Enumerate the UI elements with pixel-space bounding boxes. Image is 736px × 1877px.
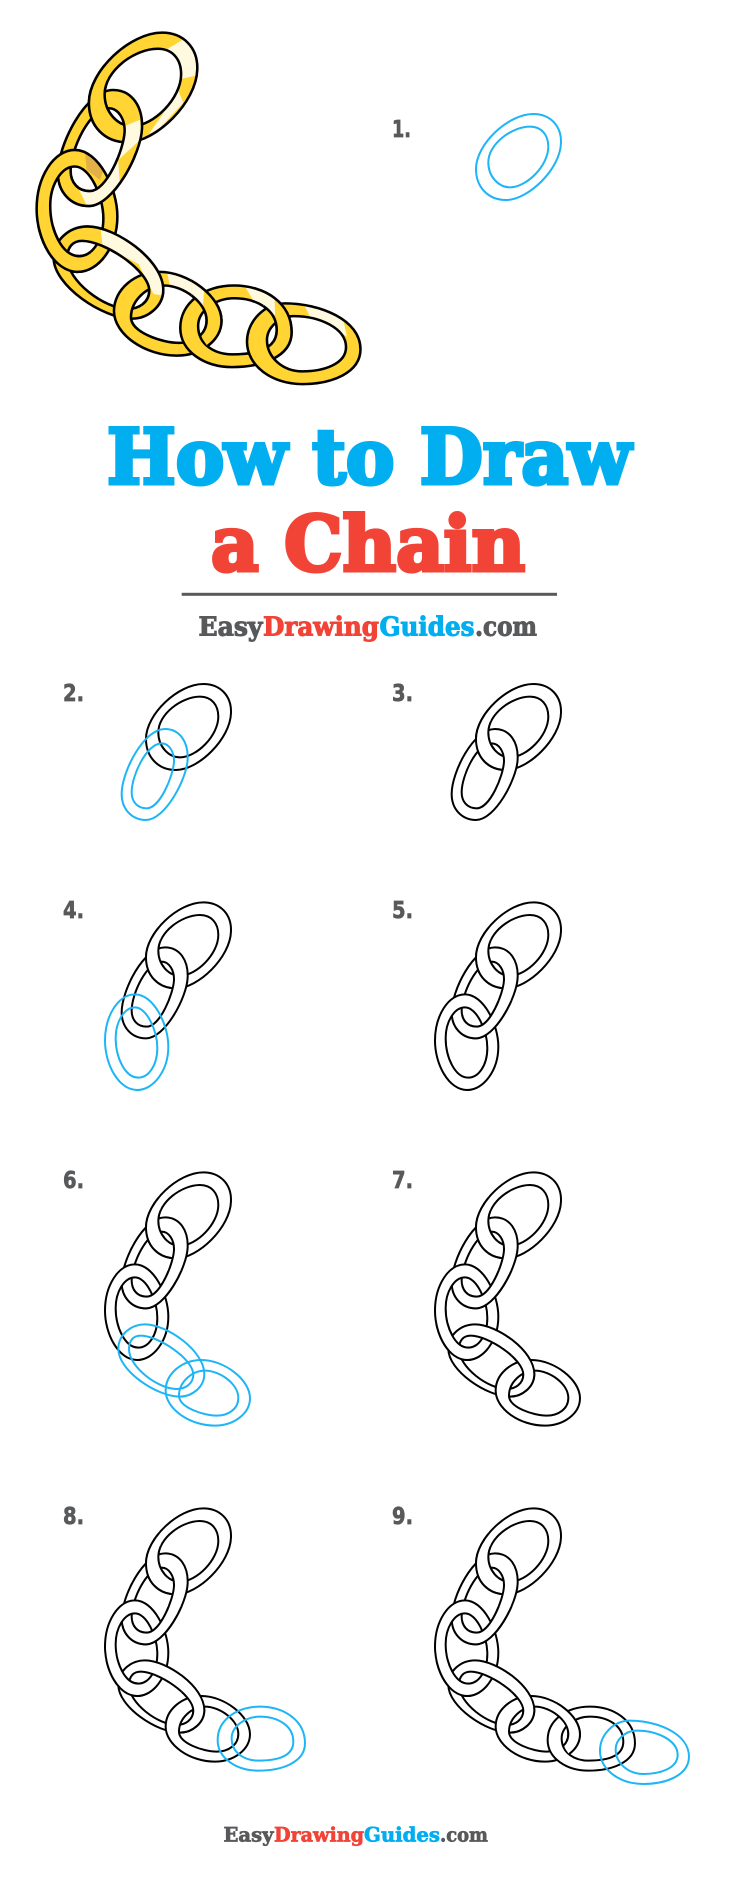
step 5: 5.: [392, 898, 413, 924]
footer brand line: Drawing: [274, 1824, 364, 1847]
step 1: 1.: [392, 117, 411, 143]
step 4: 4.: [63, 898, 84, 924]
footer brand line: [224, 1824, 488, 1847]
step 3: 3.: [392, 681, 413, 707]
step 1: [392, 114, 561, 200]
step 9: 9.: [392, 1504, 413, 1530]
brand line: Easy: [198, 613, 263, 643]
footer brand line: .com: [440, 1824, 488, 1847]
step 2: [63, 681, 231, 820]
brand line: Drawing: [263, 613, 379, 643]
title: [107, 413, 632, 589]
footer brand line: Easy: [224, 1824, 274, 1847]
step 7: 7.: [392, 1168, 413, 1194]
step 9: [392, 1504, 689, 1784]
step 2: 2.: [63, 681, 84, 707]
step 4: [63, 898, 231, 1090]
step 7: [392, 1168, 580, 1426]
title: a Chain: [211, 500, 525, 589]
brand line: [198, 613, 537, 643]
step 3: [392, 681, 561, 820]
step 8: 8.: [63, 1504, 84, 1530]
brand line: .com: [475, 613, 537, 643]
step 5: [392, 898, 561, 1090]
step 6: [63, 1168, 250, 1426]
title: How to Draw: [107, 413, 632, 502]
footer brand line: Guides: [364, 1824, 440, 1847]
step 6: 6.: [63, 1168, 84, 1194]
brand line: Guides: [380, 613, 474, 643]
illustration: finished gold chain: [37, 33, 360, 384]
step 8: [63, 1504, 305, 1771]
